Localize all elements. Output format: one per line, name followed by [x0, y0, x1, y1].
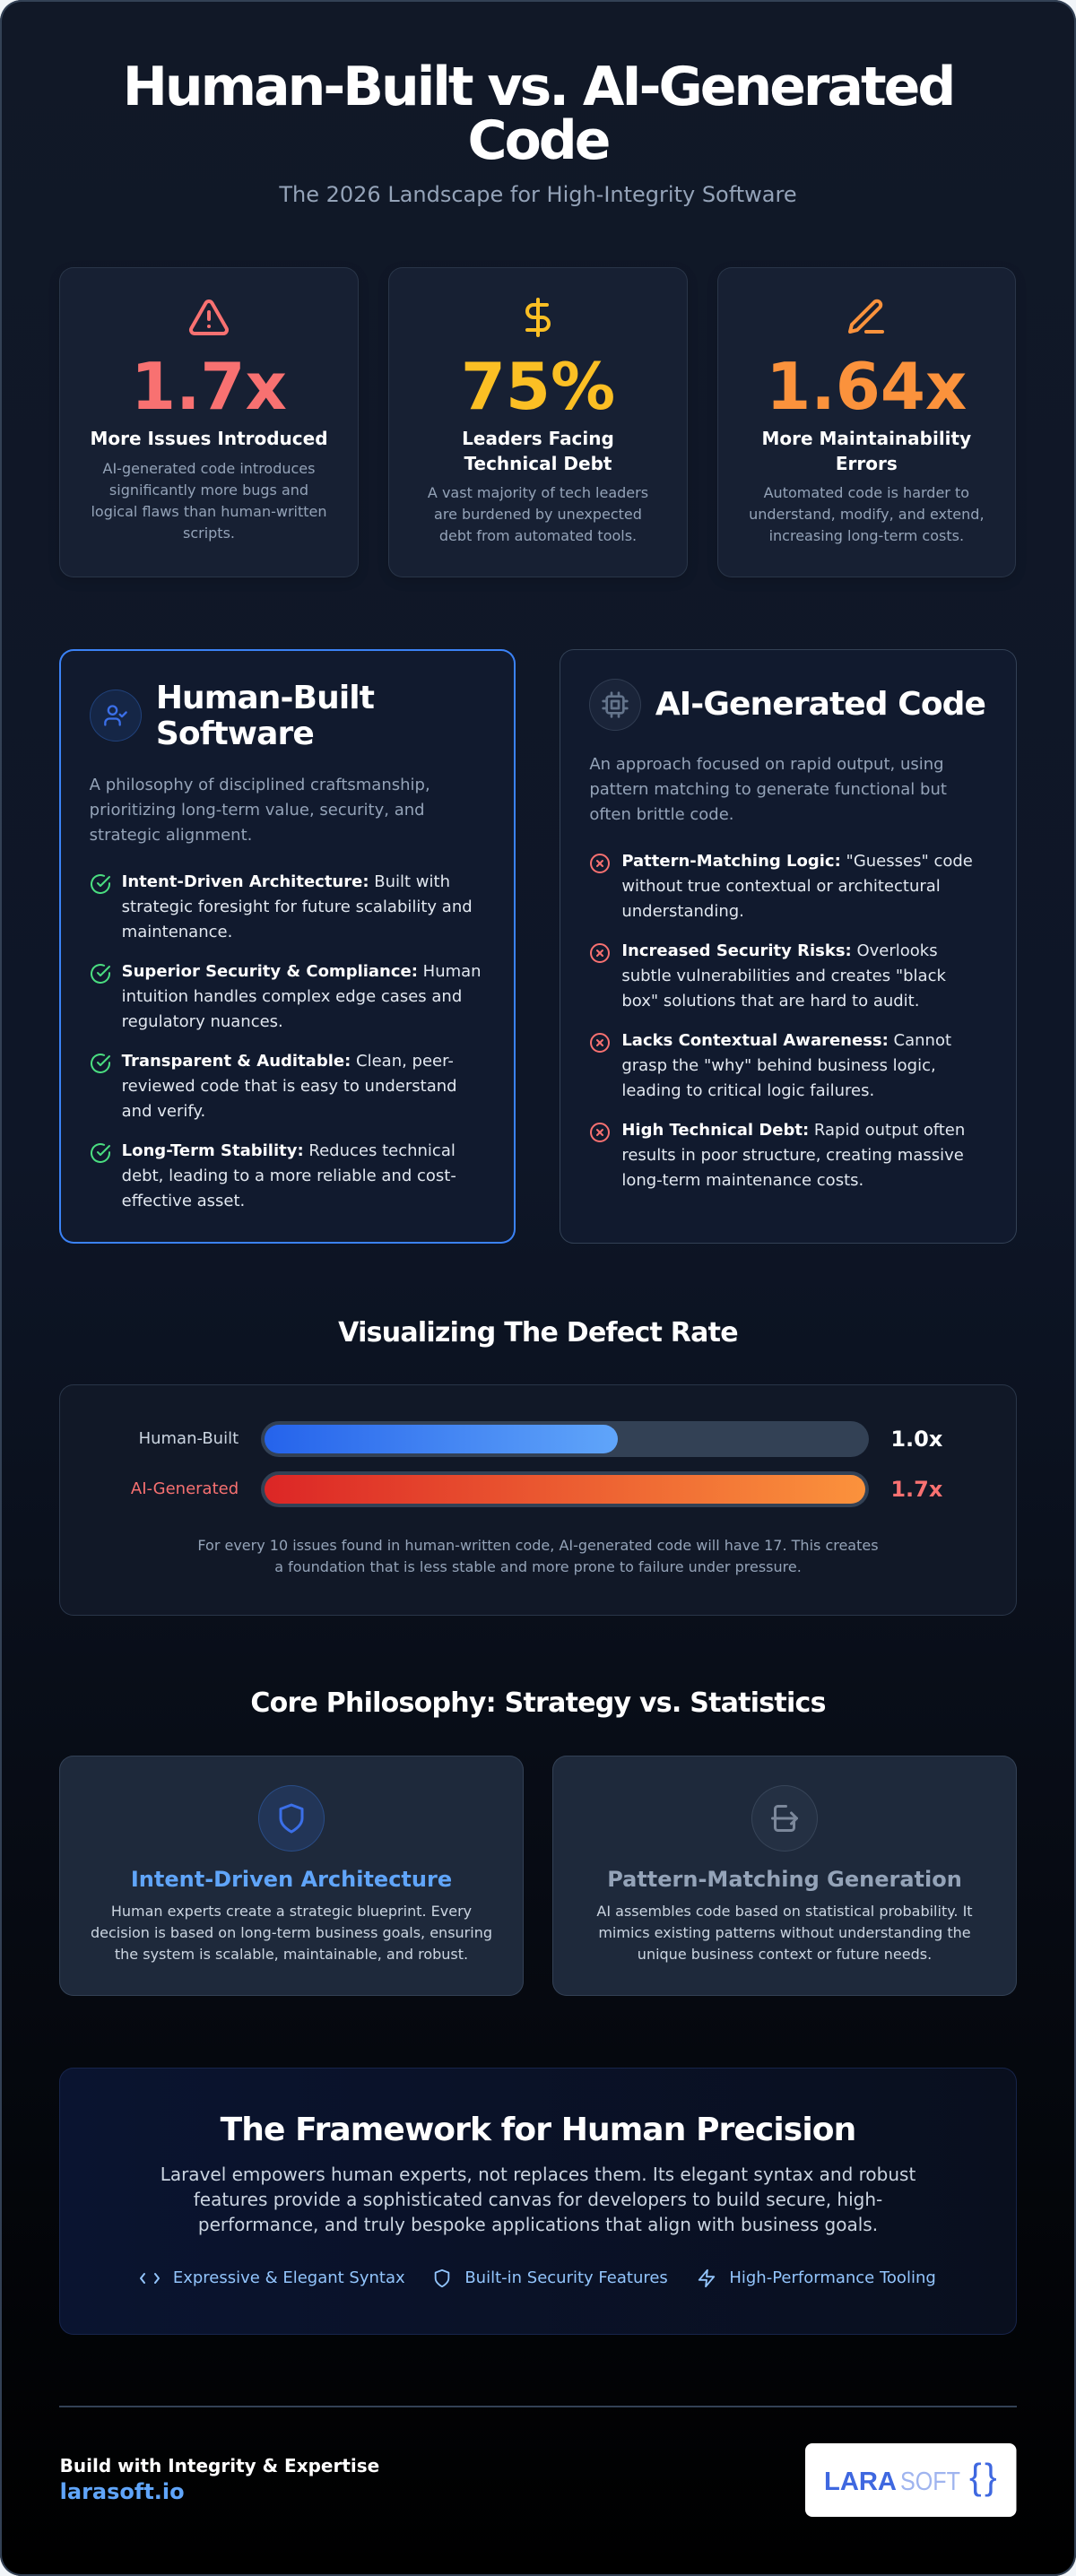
panel: stat 1.64x — [717, 267, 1016, 577]
card description: unique business context or future needs. — [638, 1946, 932, 1963]
stat number: 1.64x — [766, 349, 967, 424]
icon: cpu — [589, 679, 641, 731]
icon: box with arrow — [751, 1785, 818, 1852]
stat description: increasing long-term costs. — [769, 527, 964, 544]
list item: technical debt: High Technical Debt: Rapid output often — [621, 1121, 965, 1140]
framework heading: The Framework for Human Precision — [221, 2112, 855, 2148]
list item: context: Lacks Contextual Awareness: Cannot — [621, 1031, 951, 1050]
card description: decision is based on long-term business goals, ensuring — [91, 1924, 492, 1941]
bar track: human — [261, 1421, 869, 1457]
panel: stat 1.7x — [59, 267, 359, 577]
list item: transparent: Transparent & Auditable: Clean, peer- — [122, 1052, 454, 1071]
stat description: are burdened by unexpected — [434, 506, 642, 523]
list item: pattern matching — [590, 852, 973, 921]
icon: dollar sign — [525, 298, 551, 337]
title: Code — [468, 109, 608, 172]
framework paragraph — [161, 2164, 915, 2235]
feature: security: Built-in Security Features — [464, 2268, 668, 2287]
stat label: Errors — [836, 453, 898, 474]
bar label: human: Human-Built — [139, 1429, 239, 1448]
stat description — [91, 459, 326, 542]
stat description: significantly more bugs and — [109, 481, 308, 499]
panel: framework for human precision — [59, 2068, 1017, 2335]
heading: core philosophy: Core Philosophy: Strategy vs. Statistics — [250, 1687, 826, 1718]
panel: ai-generated code — [560, 649, 1017, 1244]
list item: stability: Long-Term Stability: Reduces technical — [122, 1141, 456, 1160]
logo: larasoft: { — [969, 2456, 982, 2497]
stat description — [749, 484, 985, 544]
list item: security risks — [590, 941, 946, 1010]
stat label — [462, 428, 614, 474]
list item: intent-driven — [90, 872, 473, 941]
card description: the system is scalable, maintainable, and robust. — [115, 1946, 468, 1963]
panel description: An approach focused on rapid output, using — [589, 755, 944, 773]
framework paragraph: features provide a sophisticated canvas for developers to build secure, high- — [194, 2189, 882, 2210]
logo: larasoft — [805, 2443, 1017, 2517]
list item: technical debt: long-term maintenance costs. — [621, 1171, 863, 1190]
panel heading: Software — [156, 716, 314, 751]
stat description: logical flaws than human-written — [91, 502, 326, 520]
card description: mimics existing patterns without understanding the — [598, 1924, 971, 1941]
icon: pen — [848, 299, 884, 334]
list item: security risks: subtle vulnerabilities and creates "black — [621, 967, 946, 985]
stat description: AI-generated code introduces — [102, 459, 315, 477]
stat description: Automated code is harder to — [764, 484, 969, 501]
stat number: 1.7x — [131, 349, 287, 424]
icon: user check — [90, 690, 142, 742]
stat label: More Issues Introduced — [90, 428, 328, 449]
list item: security: Superior Security & Compliance: Human — [122, 962, 482, 981]
list item: pattern matching: Pattern-Matching Logic: "Guesses" code — [621, 852, 973, 871]
card description — [91, 1903, 492, 1963]
list item: security: intuition handles complex edge cases and — [122, 987, 462, 1006]
list item: context: grasp the "why" behind business logic, — [621, 1056, 936, 1075]
icon: warning triangle — [188, 299, 230, 335]
panel description: pattern matching to generate functional but — [589, 780, 947, 798]
stat description: understand, modify, and extend, — [749, 506, 985, 523]
bar value: human: 1.0x — [890, 1427, 942, 1452]
list item: context: leading to critical logic failures. — [621, 1081, 874, 1100]
feature: tooling: High-Performance Tooling — [729, 2268, 936, 2287]
list item: intent-driven: maintenance. — [122, 923, 232, 941]
card description — [596, 1903, 973, 1963]
logo: larasoft: LARA — [824, 2468, 897, 2496]
panel description: often brittle code. — [589, 805, 733, 823]
bar track: ai — [261, 1471, 869, 1507]
panel description — [589, 755, 947, 823]
card title: Pattern-Matching Generation — [607, 1867, 962, 1892]
list item: transparent: and verify. — [122, 1102, 205, 1121]
chart caption — [197, 1537, 879, 1575]
list item: context — [590, 1031, 951, 1100]
footer divider — [59, 2406, 1017, 2407]
logo: larasoft: SOFT — [900, 2468, 960, 2496]
stat description: scripts. — [183, 524, 235, 542]
framework paragraph: Laravel empowers human experts, not replaces them. Its elegant syntax and robust — [161, 2164, 915, 2185]
footer tagline: Build with Integrity & Expertise — [60, 2455, 379, 2476]
stat label: More Maintainability — [761, 428, 971, 449]
panel: pattern-matching generation — [552, 1756, 1017, 1996]
panel heading: Human-Built — [156, 680, 374, 716]
title: Human-Built vs. AI-Generated — [123, 56, 953, 118]
footer url: larasoft.io — [60, 2479, 185, 2504]
subtitle: The 2026 Landscape for High-Integrity Software — [279, 182, 797, 207]
title — [123, 56, 953, 172]
stat label — [761, 428, 971, 474]
panel description — [90, 775, 430, 845]
panel heading — [156, 680, 375, 751]
list item: stability — [90, 1141, 456, 1210]
list item: transparent — [90, 1052, 457, 1121]
list item: pattern matching: understanding. — [621, 902, 744, 921]
stat number: 75% — [461, 349, 615, 424]
list item: intent-driven: Intent-Driven Architecture: Built with — [122, 872, 450, 891]
stat description — [428, 484, 648, 544]
panel: defect rate chart — [59, 1384, 1017, 1616]
list item: transparent: reviewed code that is easy to understand — [122, 1077, 457, 1096]
list item: intent-driven: strategic foresight for future scalability and — [122, 898, 473, 916]
list item: technical debt — [590, 1121, 965, 1190]
bar fill: human — [265, 1425, 618, 1453]
stat label: Leaders Facing — [462, 428, 614, 449]
feature: syntax: Expressive & Elegant Syntax — [173, 2268, 405, 2287]
list item: security: regulatory nuances. — [122, 1012, 283, 1031]
list item: security — [90, 962, 482, 1031]
bar fill: ai — [265, 1475, 865, 1504]
card description: AI assembles code based on statistical probability. It — [596, 1903, 973, 1920]
bar value: ai: 1.7x — [890, 1477, 942, 1502]
list item: security risks: Increased Security Risks: Overlooks — [621, 941, 938, 960]
list item: security risks: box" solutions that are hard to audit. — [621, 992, 919, 1010]
framework paragraph: performance, and truly bespoke applications that align with business goals. — [198, 2214, 878, 2235]
stat description: debt from automated tools. — [439, 527, 637, 544]
panel description: strategic alignment. — [90, 825, 252, 845]
chart caption: a foundation that is less stable and more prone to failure under pressure. — [274, 1558, 802, 1575]
list item: pattern matching: without true contextual or architectural — [621, 877, 941, 896]
card title: Intent-Driven Architecture — [131, 1867, 452, 1892]
panel heading: AI-Generated Code — [655, 685, 985, 723]
list item: stability: debt, leading to a more reliable and cost- — [122, 1167, 456, 1185]
panel description: A philosophy of disciplined craftsmanship, — [90, 775, 430, 794]
logo: larasoft: } — [985, 2456, 997, 2497]
panel description: prioritizing long-term value, security, and — [90, 800, 425, 820]
panel: intent-driven architecture — [59, 1756, 524, 1996]
stat description: A vast majority of tech leaders — [428, 484, 648, 501]
stat label: Technical Debt — [464, 453, 612, 474]
icon: shield — [258, 1785, 325, 1852]
bar label: ai: AI-Generated — [131, 1479, 239, 1498]
list item: technical debt: results in poor structure, creating massive — [621, 1146, 964, 1165]
list item: stability: effective asset. — [122, 1192, 245, 1210]
panel: human-built software — [59, 649, 516, 1244]
heading: defect rate: Visualizing The Defect Rate — [338, 1316, 738, 1349]
card description: Human experts create a strategic blueprint. Every — [111, 1903, 472, 1920]
panel: stat 75% — [388, 267, 688, 577]
chart caption: For every 10 issues found in human-written code, AI-generated code will have 17. This creates — [197, 1537, 879, 1554]
